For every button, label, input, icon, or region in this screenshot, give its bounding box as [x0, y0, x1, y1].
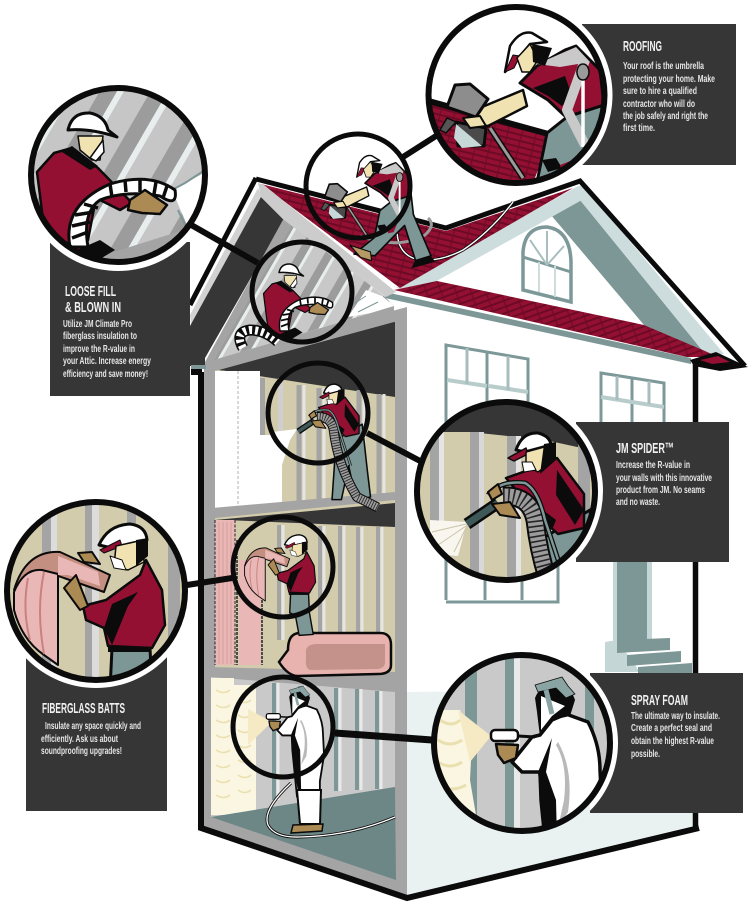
- worker: spray foam small: [248, 686, 395, 837]
- worker: spider small: [270, 384, 378, 507]
- panel text: loose fill: efficiency and save money!: [63, 368, 148, 380]
- lower roof eave: [385, 281, 748, 371]
- panel text: batts: Insulate any space quickly and: [45, 720, 141, 732]
- panel text: loose fill: & BLOWN IN: [65, 299, 121, 316]
- panel text: roofing: first time.: [623, 122, 655, 134]
- worker: loose fill small: [240, 264, 333, 348]
- panel text: loose fill: [63, 283, 151, 380]
- panel text: spider: and no waste.: [616, 496, 660, 508]
- small magnifier circle: spider: [268, 363, 368, 463]
- panel text: batts: FIBERGLASS BATTS: [42, 700, 125, 717]
- large front window: [446, 345, 558, 602]
- upper red roof: [256, 179, 745, 366]
- large circle: roofing: [426, 4, 612, 186]
- panel text: loose fill: Utilize JM Climate Pro: [63, 318, 132, 330]
- attic cutaway: [190, 178, 396, 372]
- panel text: spray foam: SPRAY FOAM: [631, 692, 688, 709]
- panel text: batts: soundproofing upgrades!: [41, 745, 122, 757]
- panel text: roofing: sure to hire a qualified: [623, 85, 697, 97]
- house: front wall: [407, 281, 696, 897]
- large circle: loose fill: [22, 79, 214, 271]
- cutaway rooms: [191, 307, 699, 898]
- large circle: fiberglass batts: [4, 499, 188, 688]
- panel text: spider: [616, 440, 712, 508]
- panel: roofing background: [582, 24, 736, 165]
- front door and steps: [605, 560, 692, 673]
- pink insulation batt: [279, 633, 391, 676]
- panel text: roofing: [623, 38, 715, 134]
- small magnifier circle: spray foam: [233, 677, 333, 777]
- connector: spray foam: [335, 733, 432, 740]
- large circle: spider: [414, 399, 603, 583]
- panel text: batts: [41, 700, 141, 757]
- panel text: spider: JM SPIDER™: [616, 440, 674, 457]
- panel text: spray foam: [631, 692, 720, 760]
- small magnifier circle: roofing: [306, 134, 410, 238]
- connector: loose fill: [186, 222, 258, 263]
- connector: batts: [187, 578, 232, 585]
- panel text: loose fill: fiberglass insulation to: [63, 330, 137, 342]
- panel text: spider: Increase the R-value in: [616, 459, 690, 471]
- connector: spider: [367, 433, 422, 462]
- large circle: spray foam: [431, 652, 618, 834]
- right gable face: [396, 186, 724, 354]
- small magnifier circle: batts: [233, 517, 333, 617]
- worker: batts small: [245, 535, 316, 635]
- panel: spider background: [576, 422, 729, 562]
- panel text: loose fill: improve the R-value in: [63, 343, 135, 355]
- panel text: spray foam: possible.: [631, 748, 660, 760]
- worker: roofing small: [321, 155, 513, 268]
- panel: loose fill background: [50, 242, 190, 396]
- panel: spray foam background: [590, 673, 743, 813]
- panel text: batts: efficiently. Ask us about: [41, 733, 118, 745]
- small magnifier circle: loose fill: [252, 242, 352, 342]
- arched gable window: [523, 227, 571, 302]
- panel text: roofing: Your roof is the umbrella: [623, 60, 704, 72]
- panel text: loose fill: LOOSE FILL: [65, 283, 116, 300]
- panel text: roofing: ROOFING: [623, 38, 662, 55]
- panel text: loose fill: your Attic. Increase energy: [63, 355, 151, 367]
- connector: roofing: [403, 136, 436, 157]
- right front window: [601, 373, 664, 425]
- panel: batts background: [26, 657, 167, 811]
- panel text: roofing: contractor who will do: [623, 98, 695, 110]
